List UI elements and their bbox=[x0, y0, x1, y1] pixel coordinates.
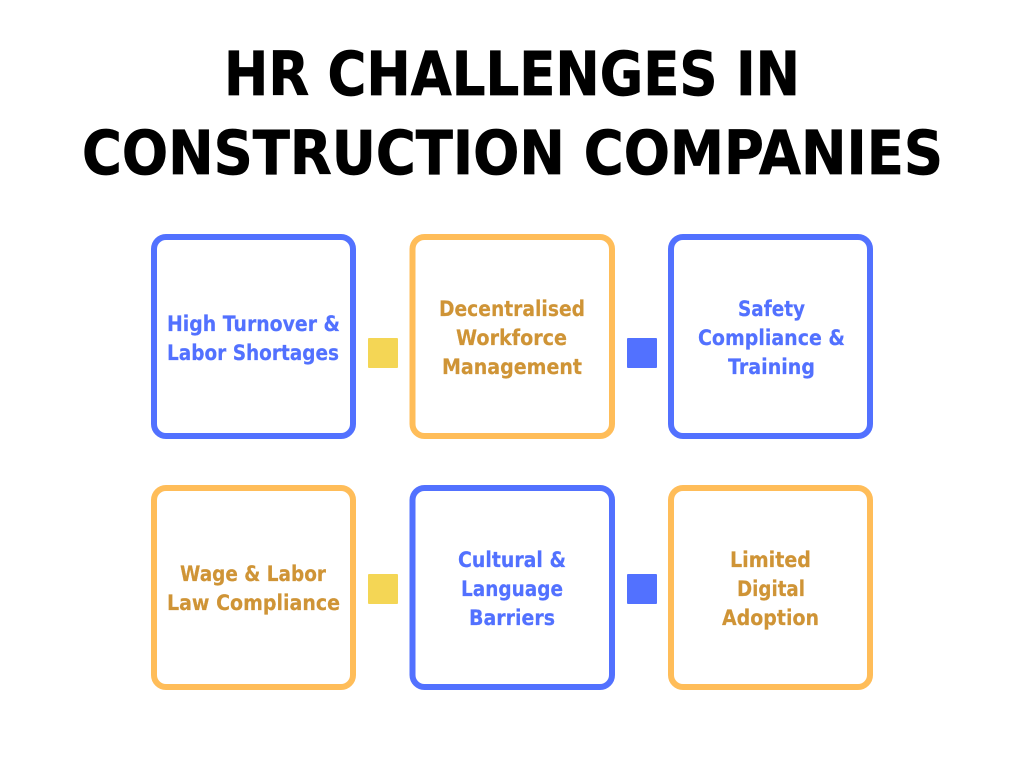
panel: limited digital adoption bbox=[671, 488, 870, 687]
panel: high turnover and labor shortages: Labor Shortages bbox=[167, 341, 339, 365]
panel: high turnover and labor shortages: High Turnover & bbox=[167, 312, 340, 336]
panel: limited digital adoption: Adoption bbox=[722, 606, 819, 630]
panel: cultural and language barriers: Barriers bbox=[469, 606, 555, 630]
panel: cultural and language barriers: Language bbox=[461, 577, 563, 601]
panel: high turnover and labor shortages bbox=[154, 237, 353, 436]
icon: yellow connector square, row two bbox=[368, 574, 398, 604]
panel: safety compliance and training: Compliance & bbox=[698, 326, 845, 350]
panel: limited digital adoption: Digital bbox=[737, 577, 805, 601]
title: CONSTRUCTION COMPANIES bbox=[82, 119, 943, 189]
icon: blue connector square, row two bbox=[627, 574, 657, 604]
panel: cultural and language barriers bbox=[412, 488, 612, 687]
panel: decentralised workforce management: Management bbox=[442, 355, 582, 379]
panel: safety compliance and training: Safety bbox=[738, 297, 805, 321]
icon: yellow connector square, row one bbox=[368, 338, 398, 368]
panel: wage and labor law compliance: Law Compliance bbox=[167, 591, 340, 615]
panel: wage and labor law compliance: Wage & Labor bbox=[180, 562, 327, 586]
panel: decentralised workforce management: Decentralised bbox=[439, 297, 585, 321]
title: HR CHALLENGES IN bbox=[224, 40, 800, 110]
title bbox=[82, 40, 943, 189]
panel: safety compliance and training bbox=[671, 237, 870, 436]
panel: wage and labor law compliance bbox=[154, 488, 353, 687]
panel: safety compliance and training: Training bbox=[728, 355, 815, 379]
panel: limited digital adoption: Limited bbox=[730, 548, 811, 572]
panel: cultural and language barriers: Cultural & bbox=[458, 548, 566, 572]
panel: decentralised workforce management: Workforce bbox=[456, 326, 567, 350]
icon: blue connector square, row one bbox=[627, 338, 657, 368]
panel: decentralised workforce management bbox=[412, 237, 612, 436]
